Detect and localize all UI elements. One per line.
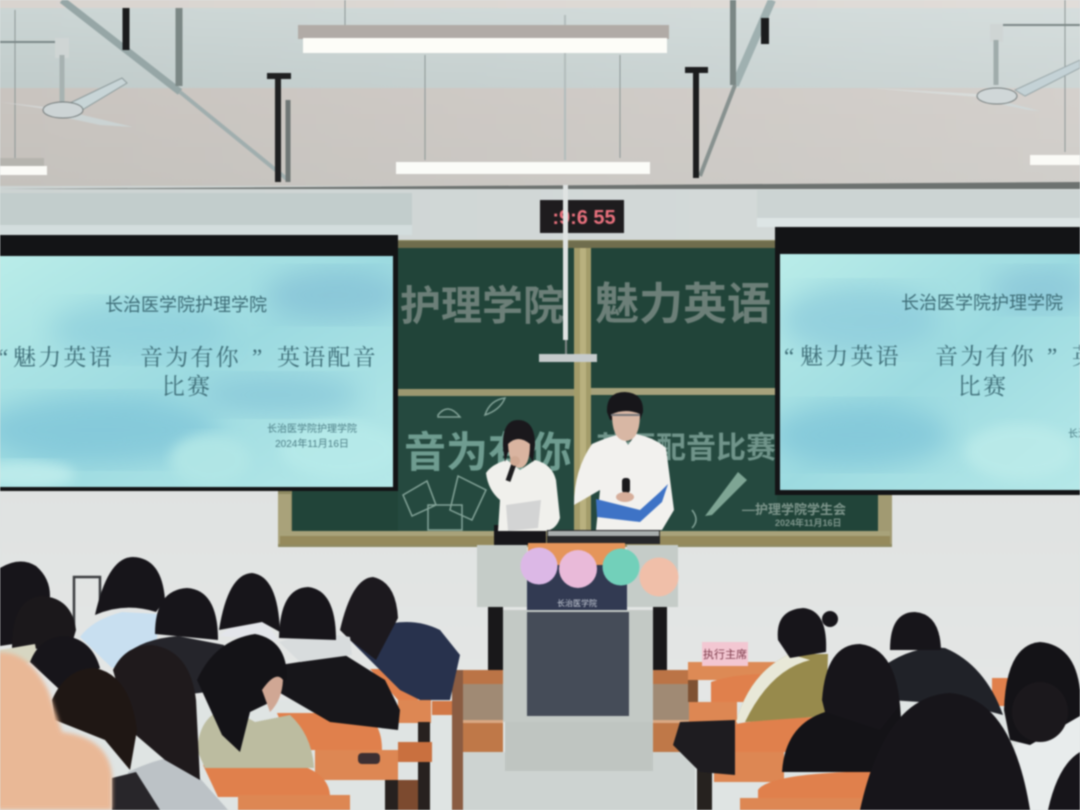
- desks and chairs right: [688, 662, 1008, 810]
- lower wall: [0, 490, 1080, 700]
- podium with legs: 长治医学院: [557, 598, 597, 608]
- balloons: [520, 548, 678, 596]
- chalk lettering: —护理学院学生会: [742, 502, 846, 517]
- chalk lettering: [400, 280, 846, 528]
- sign: executive chair: [702, 642, 748, 666]
- right screen text: ”: [1047, 344, 1059, 369]
- ceiling and upper wall: [0, 0, 1080, 240]
- right screen text: [784, 293, 1080, 440]
- right screen text: “: [784, 344, 796, 369]
- left screen text: 音为有你: [140, 345, 241, 370]
- microphone stand: [539, 185, 597, 362]
- student mid dark hair: [30, 636, 100, 690]
- suitcase handle: [74, 577, 100, 628]
- digital clock: :9:6 55: [552, 207, 616, 229]
- chalkboard: [278, 240, 892, 547]
- left screen text: [0, 295, 378, 450]
- chalk lettering: 护理学院: [400, 283, 564, 329]
- right screen text: 长治医学院护理学院: [901, 293, 1063, 313]
- student ponytail: [197, 708, 314, 768]
- student brown hair: [52, 668, 137, 770]
- ceiling beams and pipes: [15, 0, 1065, 182]
- ceiling lights: [0, 25, 1080, 175]
- left screen text: 英语配音: [277, 345, 378, 370]
- left projection screen: [0, 235, 405, 491]
- left screen text: 2024年11月16日: [275, 437, 349, 450]
- student hood centre: [782, 705, 905, 772]
- chalk lettering: 2024年11月16日: [775, 517, 842, 528]
- digital clock: [540, 200, 624, 233]
- podium with legs: [477, 530, 678, 722]
- chalk lettering: 英语配音比赛: [596, 432, 776, 465]
- left screen text: ”: [252, 345, 264, 370]
- left screen text: 魅力英语: [13, 345, 114, 370]
- ceiling fan left: [0, 38, 133, 127]
- floor and stage: [460, 670, 695, 810]
- screen housings: [0, 190, 1080, 235]
- student olive jacket: [736, 654, 828, 722]
- student blue shirt: [80, 612, 159, 668]
- student black hoodie grey hood: [275, 655, 400, 730]
- right screen text: 比赛: [958, 374, 1008, 399]
- student navy jacket: [350, 622, 460, 700]
- audience right: [673, 608, 1080, 810]
- left screen text: 长治医学院护理学院: [267, 422, 357, 435]
- audience left: [0, 557, 460, 810]
- student far left: [0, 561, 50, 646]
- left screen text: 比赛: [162, 374, 212, 399]
- chalk drawings: [403, 398, 696, 530]
- presenter right: [574, 392, 674, 530]
- right screen text: 魅力英语: [800, 344, 901, 369]
- desks and chairs left: [203, 669, 463, 810]
- presenter left: [486, 420, 560, 545]
- student long hair grey hood: [128, 758, 228, 810]
- student hoodie black: [885, 648, 1003, 715]
- blurred foreground hand: [0, 652, 112, 810]
- student white collar: [220, 620, 278, 640]
- sign: executive chair: 执行主席: [703, 647, 747, 661]
- ceiling fan right: [868, 24, 1080, 111]
- chalk lettering: 魅力英语: [595, 280, 771, 329]
- student front hair: [860, 693, 1030, 810]
- bag: [673, 720, 735, 775]
- student dark jacket: [115, 636, 224, 700]
- chalk lettering: 音为有你: [404, 429, 572, 476]
- student right with hair bun: [1015, 715, 1080, 810]
- right screen text: 音为有你: [935, 344, 1036, 369]
- right projection screen: [770, 227, 1080, 495]
- left screen text: 长治医学院护理学院: [105, 295, 267, 315]
